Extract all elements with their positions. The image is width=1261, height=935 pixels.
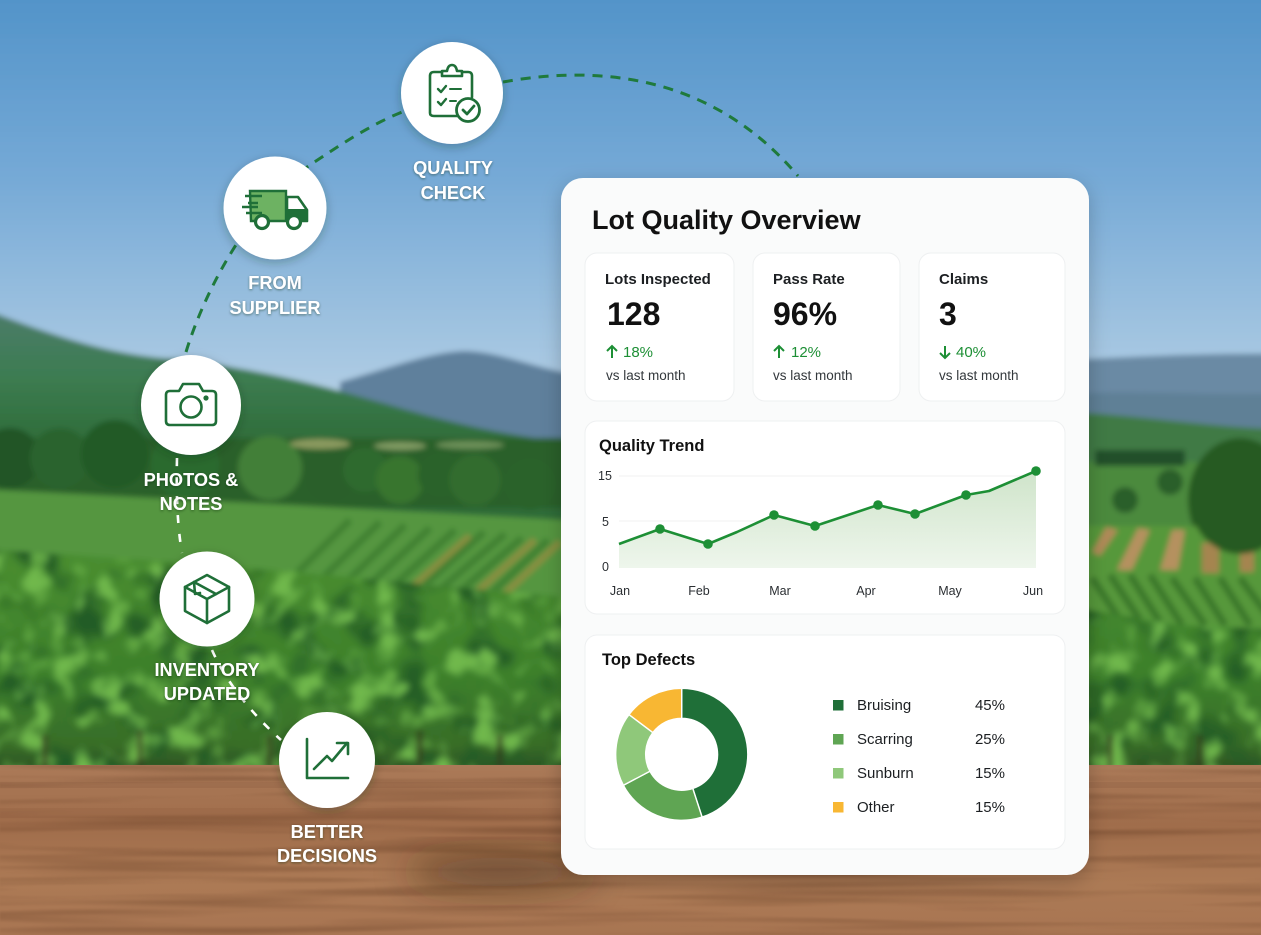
delta down 40%: 40% (956, 344, 986, 361)
path: connector from photos to inventory (177, 458, 182, 553)
step: quality check (401, 42, 503, 203)
panel: quality trend (585, 421, 1065, 614)
delta up 12%: 12% (791, 344, 821, 361)
label: quality check (413, 158, 493, 203)
delta up 12% (774, 344, 821, 361)
icon: camera (166, 384, 216, 425)
label: photos and notes: PHOTOS & (144, 470, 238, 490)
kpi card: lots inspected (585, 253, 734, 401)
legend (833, 697, 1005, 816)
path: connector arc from quality check to dashboard (503, 75, 798, 176)
legend: Scarring (857, 731, 913, 748)
title: Lot Quality Overview (592, 205, 862, 235)
legend: Sunburn (857, 765, 914, 782)
label: from supplier (230, 273, 320, 318)
line chart: 0 (602, 560, 609, 574)
step: photos and notes (141, 355, 241, 514)
kpi card: claims: 3 (939, 296, 957, 332)
label: better decisions (277, 822, 377, 866)
delta down 40% (940, 344, 986, 361)
heading: top defects: Top Defects (602, 651, 695, 669)
legend: 15% (975, 799, 1005, 816)
delta up 18%: 18% (623, 344, 653, 361)
icon: box (185, 575, 229, 623)
donut chart (616, 688, 748, 820)
step: inventory updated (154, 552, 260, 704)
label: quality check: QUALITY (413, 158, 493, 178)
path: connector arc from photos to quality check (186, 112, 402, 352)
legend: 45% (975, 697, 1005, 714)
label: quality check: CHECK (421, 183, 485, 203)
line chart: Mar (769, 584, 791, 598)
line chart: May (938, 584, 963, 598)
label: photos and notes (144, 470, 238, 514)
kpi card: claims (919, 253, 1065, 401)
label: from supplier: SUPPLIER (230, 298, 320, 318)
heading: quality trend: Quality Trend (599, 437, 704, 455)
line chart (598, 466, 1043, 598)
label: photos and notes: NOTES (160, 494, 222, 514)
label: better decisions: DECISIONS (277, 846, 377, 866)
kpi card: pass rate: 96% (773, 296, 837, 332)
line chart: Jan (610, 584, 630, 598)
kpi card: pass rate (753, 253, 900, 401)
path: connector from inventory to decisions (212, 650, 281, 740)
panel: top defects (585, 635, 1065, 849)
label: better decisions: BETTER (291, 822, 363, 842)
label: inventory updated: INVENTORY (154, 660, 260, 680)
legend: Bruising (857, 697, 911, 714)
icon: clipboard with check (430, 65, 480, 122)
line chart: Jun (1023, 584, 1043, 598)
label: from supplier: FROM (248, 273, 302, 293)
legend: 25% (975, 731, 1005, 748)
icon: delivery truck (242, 191, 307, 228)
kpi card: claims: Claims (939, 271, 988, 288)
label: inventory updated (154, 660, 260, 704)
step: from supplier (224, 156, 326, 318)
kpi card: lots inspected: Lots Inspected (605, 271, 711, 288)
legend: Other (857, 799, 895, 816)
line chart: Apr (856, 584, 876, 598)
delta up 18% (607, 344, 653, 361)
label: inventory updated: UPDATED (164, 684, 250, 704)
line chart: 15 (598, 469, 612, 483)
kpi card: claims: vs last month (939, 368, 1019, 383)
line chart: 5 (602, 515, 609, 529)
kpi card: pass rate: vs last month (773, 368, 853, 383)
legend: 15% (975, 765, 1005, 782)
kpi card: pass rate: Pass Rate (773, 271, 845, 288)
step: better decisions (277, 712, 377, 866)
icon: growth chart (307, 739, 348, 778)
panel: lot quality overview dashboard (561, 178, 1089, 875)
kpi card: lots inspected: vs last month (606, 368, 686, 383)
kpi card: lots inspected: 128 (607, 296, 660, 332)
line chart: Feb (688, 584, 710, 598)
